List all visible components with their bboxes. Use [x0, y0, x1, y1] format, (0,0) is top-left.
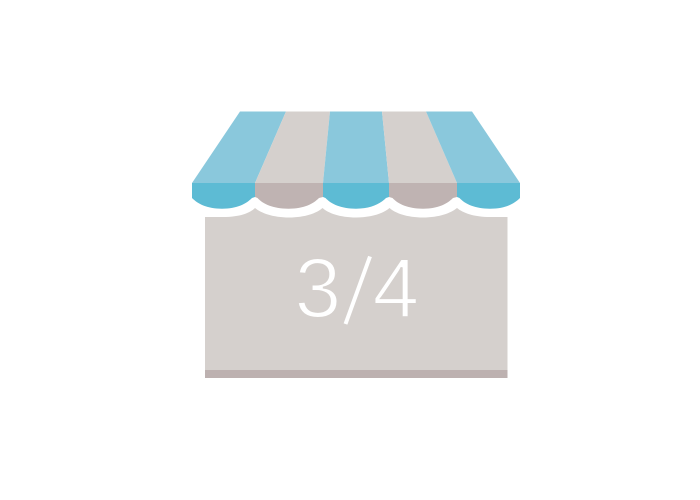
awning roof stripes: [192, 112, 520, 183]
shop wall: [205, 190, 508, 378]
awning valance scallops: [192, 183, 520, 209]
label: 3/4: 3: [294, 241, 341, 335]
label: 3/4: [294, 241, 419, 335]
awning: [192, 112, 520, 209]
white scalloped gap below awning: [190, 190, 522, 218]
label: 3/4: 4: [372, 241, 419, 335]
